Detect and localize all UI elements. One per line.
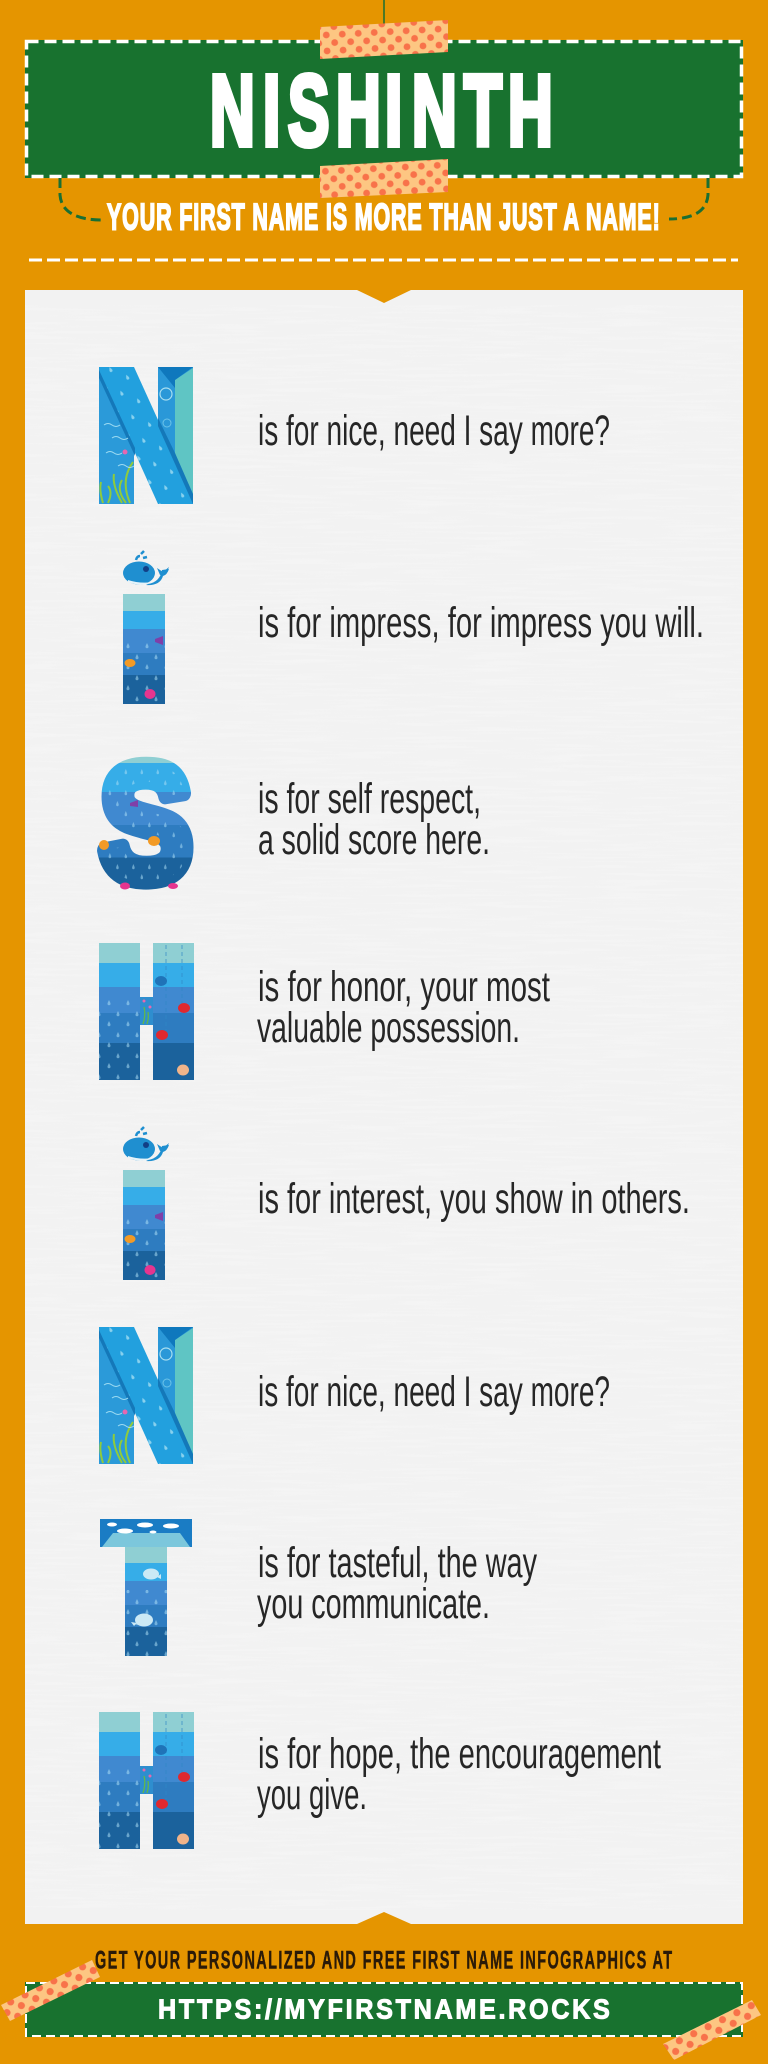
icon: letter H bbox=[99, 1712, 194, 1849]
text: T meaning bbox=[257, 1539, 537, 1628]
icon: letter S: S bbox=[100, 732, 192, 916]
row: N bbox=[99, 367, 610, 504]
text: H meaning: you give. bbox=[257, 1771, 367, 1819]
text: T meaning: is for tasteful, the way bbox=[258, 1539, 537, 1587]
connector: left dashed curve bbox=[60, 178, 103, 220]
text: S meaning: a solid score here. bbox=[258, 816, 490, 864]
text: H meaning: is for honor, your most bbox=[258, 963, 550, 1011]
icon: whale bbox=[123, 551, 169, 585]
panel: letters bbox=[25, 290, 743, 1924]
tape: footer right bbox=[663, 2000, 761, 2060]
connector: right dashed curve bbox=[669, 178, 708, 219]
subtitle: YOUR FIRST NAME IS MORE THAN JUST A NAME! bbox=[107, 198, 660, 238]
footer banner bbox=[25, 1982, 743, 2037]
icon: letter T bbox=[100, 1519, 192, 1656]
footer call to action: GET YOUR PERSONALIZED AND FREE FIRST NAME INFOGRAPHICS AT bbox=[95, 1948, 672, 1975]
icon: letter I with whale bbox=[123, 551, 169, 704]
icon: letter I with whale bbox=[123, 1127, 169, 1280]
row: T bbox=[100, 1519, 537, 1656]
title: NISHINTH bbox=[210, 55, 553, 167]
row: H bbox=[99, 943, 550, 1080]
icon: letter H bbox=[99, 943, 194, 1080]
row: I bbox=[123, 551, 704, 704]
tape: footer left bbox=[1, 1960, 100, 2021]
text: H meaning bbox=[257, 1730, 661, 1819]
text: S meaning: is for self respect, bbox=[258, 775, 481, 823]
text: H meaning: valuable possession. bbox=[257, 1004, 520, 1052]
icon: letter S: S bbox=[100, 732, 192, 916]
tape: bottom bbox=[320, 159, 448, 198]
text: T meaning: you communicate. bbox=[257, 1580, 490, 1628]
url: HTTPS://MYFIRSTNAME.ROCKS bbox=[158, 1993, 610, 2025]
header banner bbox=[25, 0, 743, 198]
icon: letter N bbox=[99, 367, 193, 504]
tape: top bbox=[320, 20, 448, 59]
text: S meaning bbox=[258, 775, 490, 864]
row: H second bbox=[99, 1712, 661, 1849]
row: S bbox=[99, 732, 490, 916]
row: I second bbox=[123, 1127, 690, 1280]
icon: letter N bbox=[99, 1327, 193, 1464]
text: H meaning bbox=[257, 963, 550, 1052]
row: N second bbox=[99, 1327, 610, 1464]
icon: whale bbox=[123, 1127, 169, 1161]
